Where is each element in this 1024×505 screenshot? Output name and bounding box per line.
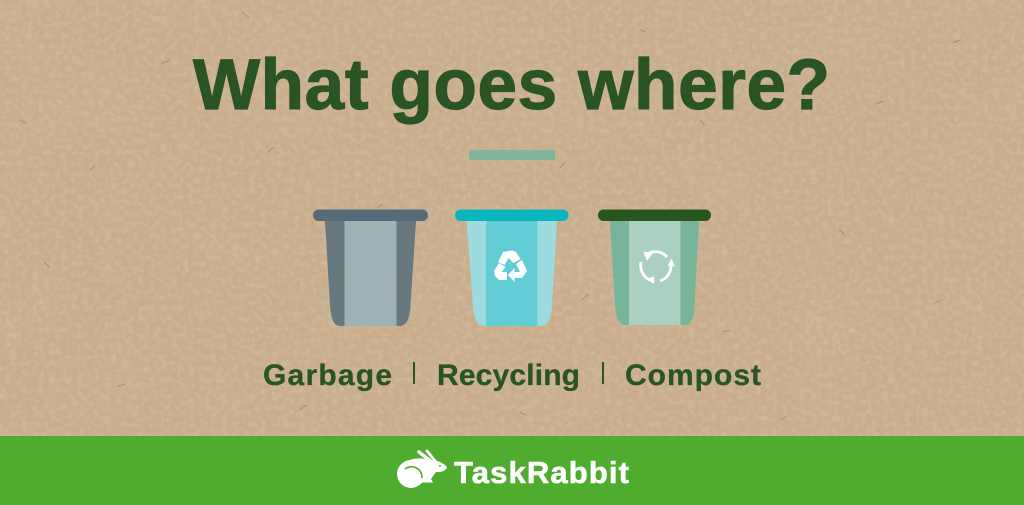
icon: recycling symbol — [494, 250, 527, 282]
label: garbage: Garbage — [263, 359, 392, 392]
icon: garbage bin — [313, 210, 428, 326]
icon: recycling bin — [455, 210, 568, 326]
label: compost: Compost — [625, 359, 761, 392]
floating bin lid — [470, 150, 555, 160]
bin labels — [263, 359, 761, 392]
label dividers — [413, 362, 604, 384]
icon: compost bin — [598, 210, 711, 325]
footer band — [0, 436, 1024, 505]
wordmark: TaskRabbit — [454, 455, 629, 490]
logo: TaskRabbit — [397, 451, 629, 490]
icon: compost cycle arrows — [641, 252, 675, 284]
title: What goes where? — [193, 46, 830, 125]
icon: rabbit — [397, 451, 447, 488]
label: recycling: Recycling — [437, 359, 580, 392]
